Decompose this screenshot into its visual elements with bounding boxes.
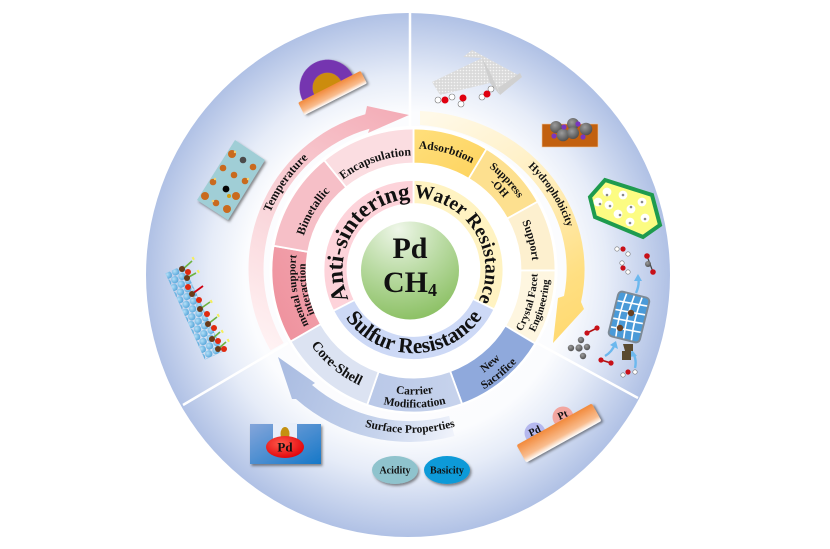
segment: sulfur resistance: Sulfur Resistance <box>346 311 482 354</box>
icon: acidity ellipse <box>372 456 418 484</box>
icon: Pd Pt on support bar <box>517 403 601 463</box>
segment: suppress -OH: -OH <box>491 181 510 198</box>
arrow: hydrophobicity <box>420 111 585 343</box>
icon: encapsulated dome <box>285 46 367 115</box>
icon: metal support interface slab <box>165 257 230 360</box>
center: Pd CH4: CH <box>383 266 428 299</box>
segment: crystal facet engineering: Crystal Facet <box>516 274 538 330</box>
arrow: temperature <box>248 106 409 350</box>
sector dividers <box>183 13 638 405</box>
segment: encapsulation <box>324 130 414 186</box>
segment: new sacrifice: Sacrifice <box>481 359 516 389</box>
icon: Pd confined in blue block <box>250 423 321 464</box>
segment: core-shell <box>292 326 379 404</box>
segment: suppress -OH <box>468 149 536 218</box>
segment: water resistance: Water Resistance <box>416 184 496 304</box>
background disc <box>146 13 670 537</box>
segment: metal support interaction: mental support <box>290 254 309 327</box>
segment: crystal facet engineering <box>506 270 554 342</box>
icon: basicity ellipse <box>424 456 470 484</box>
segment: anti-sintering: Anti-sintering <box>327 187 410 300</box>
segment: support: Support <box>522 220 538 260</box>
icon: bimetallic particles plate <box>197 140 265 220</box>
icon: Pd Pt on support bar: Pd <box>527 424 543 439</box>
segment: metal support interaction: interaction <box>298 264 314 316</box>
segment: adsorbtion: Adsorbtion <box>418 141 474 164</box>
segment: bimetallic <box>274 162 345 253</box>
segment: bimetallic: Bimetallic <box>296 188 330 236</box>
segment: metal support interaction <box>272 247 320 342</box>
center: Pd CH4 <box>361 222 459 320</box>
icon: Pd Pt on support bar: Pt <box>556 408 570 423</box>
middle ring <box>272 130 554 412</box>
arrow: temperature: Temperature <box>263 155 308 211</box>
white backing of rings <box>270 126 558 414</box>
icon: clusters on orange support <box>542 118 598 147</box>
center: Pd CH4: 4 <box>428 280 437 300</box>
icon: membrane reactor with gases <box>568 246 656 377</box>
segment: core-shell: Core-Shell <box>312 342 363 386</box>
segment: new sacrifice: New <box>480 355 499 373</box>
icon: basicity ellipse: Basicity <box>430 466 464 476</box>
segment: carrier modification: Modification <box>383 396 446 408</box>
segment: suppress -OH: Suppress <box>490 163 522 198</box>
icon: zeolite block with water <box>432 50 522 107</box>
segment: encapsulation: Encapsulation <box>338 148 411 180</box>
center: Pd CH4: Pd <box>392 232 428 265</box>
arrow: hydrophobicity: Hydrophobicity <box>528 162 572 226</box>
icon: Pd confined in blue block: Pd <box>277 440 293 454</box>
arrow: surface properties <box>278 357 454 442</box>
segment: crystal facet engineering: Engineering <box>528 280 552 332</box>
arrow: surface properties: Surface Properties <box>365 420 454 435</box>
inner ring <box>324 181 503 360</box>
segment: carrier modification <box>368 372 463 412</box>
segment: new sacrifice <box>451 326 534 403</box>
segment: support <box>508 201 554 270</box>
icon: green hexagon support <box>590 180 660 237</box>
icon: acidity ellipse: Acidity <box>379 466 411 476</box>
segment: carrier modification: Carrier <box>396 386 433 394</box>
segment: adsorbtion <box>414 130 486 178</box>
